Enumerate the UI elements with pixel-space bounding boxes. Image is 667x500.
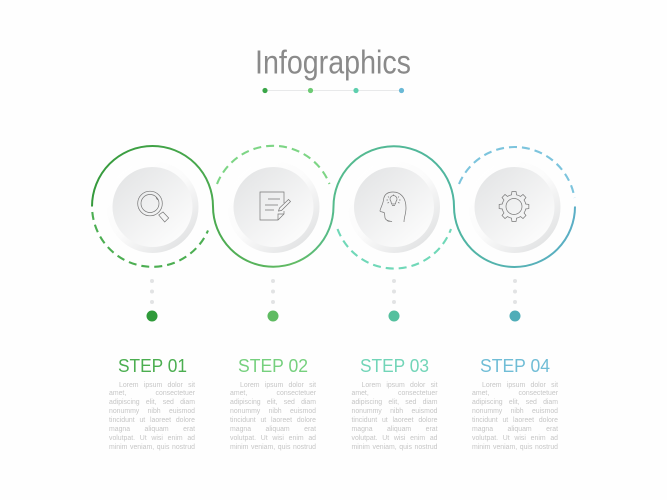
text block: step 02 bbox=[230, 382, 316, 451]
dashed arc 3 bbox=[338, 229, 451, 269]
title dot rule bbox=[262, 88, 404, 93]
title: Infographics bbox=[255, 44, 411, 80]
text block: step 03 bbox=[352, 382, 438, 451]
icon: gear bbox=[499, 192, 529, 221]
disc 1 bbox=[106, 161, 198, 253]
disc 4 bbox=[468, 161, 560, 253]
text block: step 01: adipiscing elit, sed diam bbox=[109, 399, 195, 406]
dashed arc 4 bbox=[459, 147, 574, 198]
text block: step 01: Lorem ipsum dolor sit bbox=[119, 382, 195, 388]
text block: step 03: adipiscing elit, sed diam bbox=[352, 399, 438, 406]
text block: step 03: tincidunt ut laoreet dolore bbox=[352, 417, 438, 424]
text block: step 02: minim veniam, quis nostrud bbox=[230, 444, 316, 451]
text block: step 01: tincidunt ut laoreet dolore bbox=[109, 417, 195, 424]
text block: step 01 bbox=[109, 382, 195, 451]
icon: document and pen bbox=[260, 192, 290, 220]
disc 3 bbox=[348, 161, 440, 253]
connector dots 3 bbox=[388, 279, 400, 322]
text block: step 03: minim veniam, quis nostrud bbox=[352, 444, 438, 451]
dashed arc 2 bbox=[217, 146, 330, 184]
connector dots 4 bbox=[510, 279, 520, 322]
text block: step 04: nonummy nibh euismod bbox=[472, 408, 558, 415]
text block: step 04: magna aliquam erat bbox=[472, 426, 558, 433]
heading: step 01: STEP 01 bbox=[118, 356, 187, 376]
text block: step 04: tincidunt ut laoreet dolore bbox=[472, 417, 558, 424]
solid wave line bbox=[92, 146, 575, 267]
text block: step 04 bbox=[472, 382, 558, 451]
connector dots 1 bbox=[146, 279, 158, 322]
text block: step 01: magna aliquam erat bbox=[109, 426, 195, 433]
text block: step 04: Lorem ipsum dolor sit bbox=[482, 382, 558, 388]
disc 2 bbox=[228, 161, 320, 253]
text block: step 04: amet, consectetuer bbox=[472, 390, 558, 397]
text block: step 02: adipiscing elit, sed diam bbox=[230, 399, 316, 406]
text block: step 01: nonummy nibh euismod bbox=[109, 408, 195, 415]
text block: step 03: magna aliquam erat bbox=[352, 426, 438, 433]
text block: step 02: nonummy nibh euismod bbox=[230, 408, 316, 415]
text block: step 02: tincidunt ut laoreet dolore bbox=[230, 417, 316, 424]
text block: step 01: volutpat. Ut wisi enim ad bbox=[109, 435, 195, 442]
text block: step 04: minim veniam, quis nostrud bbox=[472, 444, 558, 451]
text block: step 02: magna aliquam erat bbox=[230, 426, 316, 433]
heading: step 02: STEP 02 bbox=[238, 356, 308, 376]
heading: step 04: STEP 04 bbox=[480, 356, 550, 376]
icon: head with light bulb bbox=[380, 192, 406, 222]
text block: step 03: nonummy nibh euismod bbox=[352, 408, 438, 415]
text block: step 01: amet, consectetuer bbox=[109, 390, 195, 397]
text block: step 04: adipiscing elit, sed diam bbox=[472, 399, 558, 406]
text block: step 02: amet, consectetuer bbox=[230, 390, 316, 397]
text block: step 01: minim veniam, quis nostrud bbox=[109, 444, 195, 451]
text block: step 02: Lorem ipsum dolor sit bbox=[240, 382, 316, 388]
dashed arc 1 bbox=[92, 212, 208, 267]
connector dots 2 bbox=[268, 279, 278, 322]
heading: step 03: STEP 03 bbox=[360, 356, 429, 376]
text block: step 03: volutpat. Ut wisi enim ad bbox=[352, 435, 438, 442]
text block: step 02: volutpat. Ut wisi enim ad bbox=[230, 435, 316, 442]
text block: step 03: Lorem ipsum dolor sit bbox=[362, 382, 438, 388]
text block: step 04: volutpat. Ut wisi enim ad bbox=[472, 435, 558, 442]
text block: step 03: amet, consectetuer bbox=[352, 390, 438, 397]
icon: magnifier bbox=[138, 191, 169, 222]
